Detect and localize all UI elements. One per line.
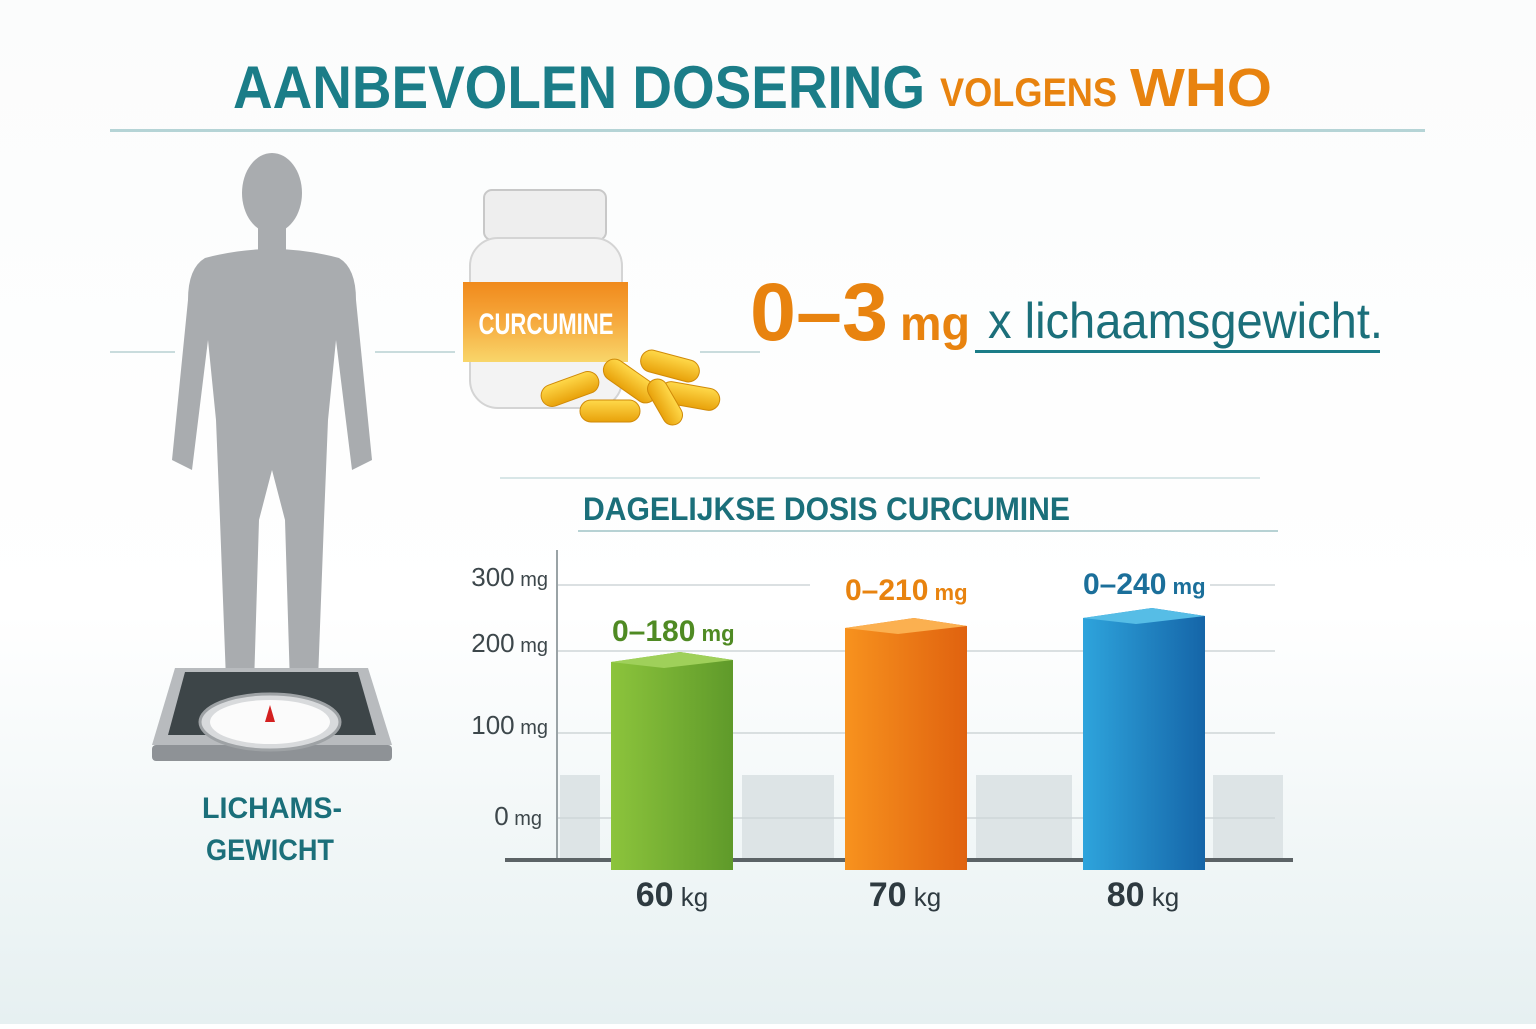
title: VOLGENS: [940, 71, 1117, 115]
title: WHO: [1130, 58, 1272, 118]
icon: curcumine jar: CURCUMINE: [478, 308, 614, 341]
bar chart: 70 kg: [869, 876, 941, 914]
label: lichamsgewicht: LICHAMS-: [202, 792, 342, 825]
label: lichamsgewicht: [202, 792, 342, 867]
icon: curcumine jar: [463, 190, 721, 429]
chart title: DAGELIJKSE DOSIS CURCUMINE: [583, 491, 1070, 527]
person silhouette: [172, 153, 372, 685]
bar chart: 0–240 mg: [1083, 568, 1206, 601]
bar chart: 100 mg: [471, 710, 548, 740]
bar chart: 60 kg: [636, 876, 708, 914]
formula: [750, 267, 1383, 358]
formula: 0–3: [750, 267, 888, 358]
bar chart: 300 mg: [471, 562, 548, 592]
label: lichamsgewicht: GEWICHT: [206, 834, 334, 867]
bar chart: 0–180 mg: [612, 615, 735, 648]
scale: [152, 668, 392, 761]
formula: mg: [900, 298, 970, 351]
bar chart: 0–210 mg: [845, 574, 968, 607]
bar chart: [471, 550, 1293, 914]
title: AANBEVOLEN DOSERING: [233, 54, 925, 121]
bar chart: 200 mg: [471, 628, 548, 658]
bar chart: 0 mg: [494, 801, 542, 831]
formula: x lichaamsgewicht.: [988, 293, 1383, 349]
bar chart: 80 kg: [1107, 876, 1179, 914]
